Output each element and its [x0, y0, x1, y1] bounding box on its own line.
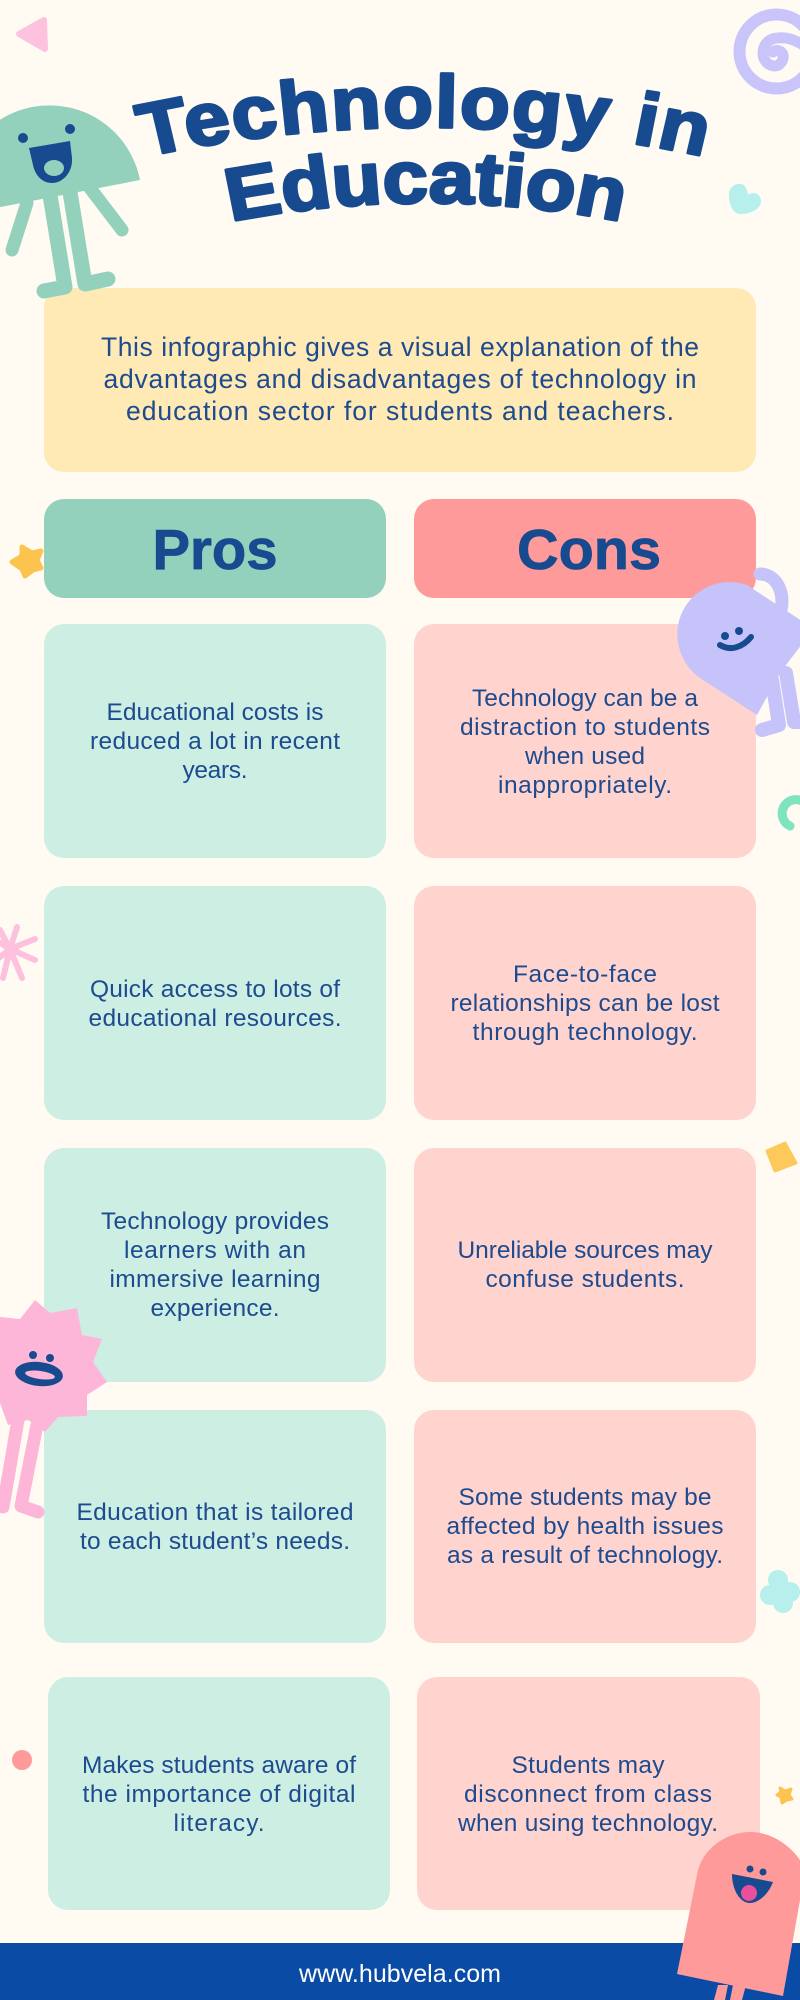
- panel: con 4: as a result of technology.: [447, 1542, 723, 1569]
- panel: pro 4: to each student’s needs.: [80, 1528, 350, 1555]
- panel: pro 3: [44, 1148, 386, 1382]
- panel: con 5: [417, 1677, 760, 1910]
- panel: con 2: through technology.: [472, 1019, 698, 1046]
- icon: yellow square: [767, 1143, 796, 1171]
- panel: pro 4: Education that is tailored: [76, 1499, 354, 1526]
- title: Technology in: [132, 72, 707, 157]
- character: salmon popsicle: [677, 1832, 800, 2000]
- heading: pros: Pros: [152, 518, 278, 582]
- icon: coral dot: [12, 1750, 32, 1770]
- panel: con 1: [414, 624, 756, 858]
- intro panel: advantages and disadvantages of technology in: [104, 364, 696, 394]
- icon: pink triangle: [19, 20, 45, 49]
- title: [132, 72, 707, 222]
- panel: con 5: disconnect from class: [464, 1781, 712, 1808]
- panel: con 4: Some students may be: [458, 1484, 712, 1511]
- character: pink spiky: [0, 1300, 107, 1512]
- panel: con 5: Students may: [512, 1752, 665, 1779]
- intro panel: This infographic gives a visual explanation of the: [101, 332, 699, 362]
- panel: pro 5: literacy.: [174, 1810, 264, 1837]
- heading: pros: [44, 499, 386, 598]
- heading: cons: Cons: [517, 518, 661, 582]
- icon: cyan plus blob: [760, 1570, 800, 1613]
- panel: pro 3: Technology provides: [101, 1208, 329, 1235]
- panel: pro 1: [44, 624, 386, 858]
- icon: cyan heart: [729, 184, 761, 214]
- panel: pro 5: the importance of digital: [82, 1781, 356, 1808]
- panel: con 5: when using technology.: [457, 1810, 718, 1837]
- panel: pro 4: [44, 1410, 386, 1643]
- panel: con 1: distraction to students: [460, 714, 710, 741]
- panel: con 2: relationships can be lost: [450, 990, 720, 1017]
- panel: pro 1: Educational costs is: [106, 699, 324, 726]
- character: lavender heart: [677, 574, 800, 730]
- panel: pro 1: reduced a lot in recent: [90, 728, 340, 755]
- intro panel: [44, 288, 756, 472]
- panel: con 1: Technology can be a: [472, 685, 698, 712]
- panel: pro 2: Quick access to lots of: [90, 976, 340, 1003]
- panel: con 1: when used: [524, 743, 645, 770]
- heading: cons: [414, 499, 756, 598]
- panel: con 3: Unreliable sources may: [458, 1237, 713, 1264]
- icon: green arc: [782, 800, 800, 826]
- panel: con 4: [414, 1410, 756, 1643]
- panel: con 2: Face-to-face: [513, 961, 657, 988]
- panel: pro 2: educational resources.: [88, 1005, 342, 1032]
- panel: pro 3: experience.: [150, 1295, 280, 1322]
- panel: con 3: [414, 1148, 756, 1382]
- footer band: [0, 1943, 800, 2000]
- icon: yellow star left: [12, 547, 41, 576]
- footer url: www.hubvela.com: [298, 1960, 501, 1988]
- intro panel: education sector for students and teachers.: [126, 396, 674, 426]
- panel: con 1: inappropriately.: [498, 772, 672, 799]
- panel: pro 3: learners with an: [124, 1237, 306, 1264]
- title: Education: [224, 151, 624, 222]
- panel: pro 2: [44, 886, 386, 1120]
- panel: con 3: confuse students.: [486, 1266, 684, 1293]
- panel: pro 3: immersive learning: [110, 1266, 320, 1293]
- character: teal jellyfish: [0, 105, 140, 291]
- panel: con 4: affected by health issues: [446, 1513, 724, 1540]
- panel: pro 1: years.: [182, 757, 248, 784]
- panel: con 2: [414, 886, 756, 1120]
- icon: lavender spiral: [740, 14, 800, 88]
- panel: pro 5: [48, 1677, 390, 1910]
- icon: pink asterisk: [0, 927, 35, 978]
- panel: pro 5: Makes students aware of: [82, 1752, 356, 1779]
- icon: yellow star right: [777, 1788, 792, 1803]
